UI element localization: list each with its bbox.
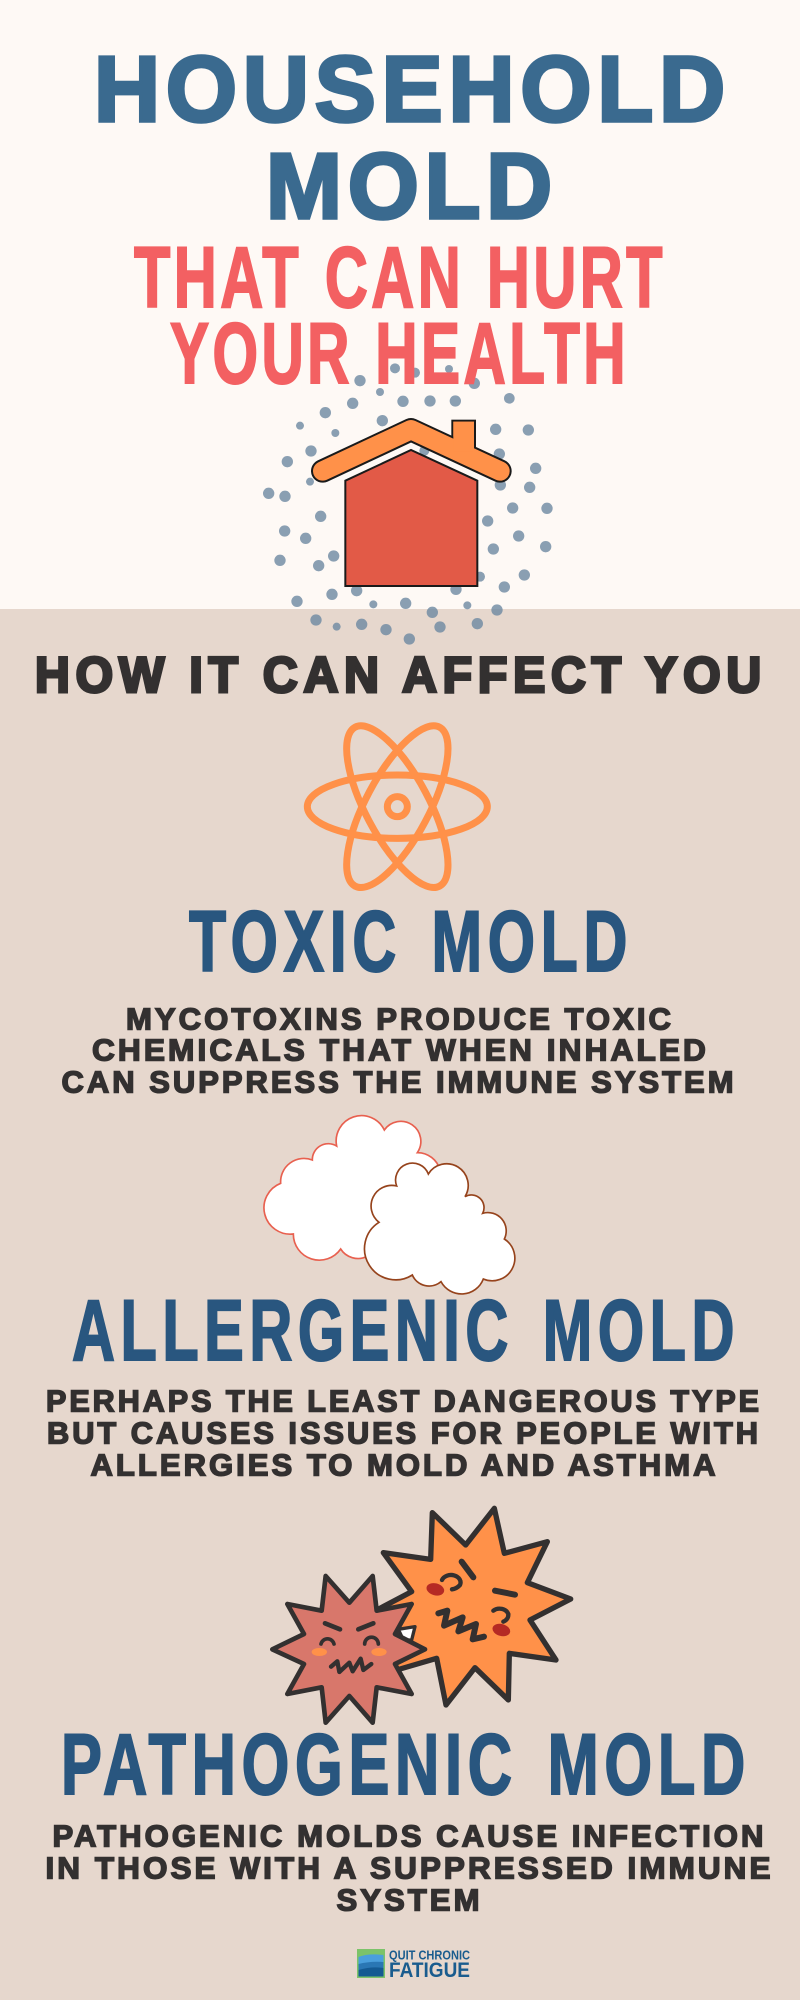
subtitle: that can hurt your health <box>134 230 666 402</box>
text: allergenic mold description: ALLERGIES TO MOLD AND ASTHMA <box>90 1447 719 1482</box>
text: allergenic mold description <box>46 1383 762 1482</box>
icon: orange spore <box>380 1508 571 1705</box>
icon: spore dots <box>263 363 553 645</box>
text: allergenic mold description: BUT CAUSES ISSUES FOR PEOPLE WITH <box>47 1415 761 1450</box>
text: logo wordmark: FATIGUE <box>389 1959 470 1982</box>
text: toxic mold description <box>62 1001 736 1099</box>
panel: bottom background <box>0 609 800 2000</box>
text: logo wordmark <box>389 1948 471 1982</box>
icon: clouds <box>264 1116 515 1294</box>
text: pathogenic mold description: SYSTEM <box>336 1882 482 1917</box>
icon: atom <box>307 712 487 901</box>
text: toxic mold description: MYCOTOXINS PRODUCE TOXIC <box>126 1001 674 1036</box>
title: household mold <box>94 37 731 238</box>
text: toxic mold description: CHEMICALS THAT WHEN INHALED <box>92 1032 709 1067</box>
heading: toxic mold: TOXIC MOLD <box>189 894 633 990</box>
heading: how it can affect you: HOW IT CAN AFFECT YOU <box>35 647 767 703</box>
title: household mold: HOUSEHOLD <box>94 37 731 141</box>
title: household mold: MOLD <box>266 134 558 238</box>
text: logo wordmark: QUIT CHRONIC <box>389 1948 471 1962</box>
text: toxic mold description: CAN SUPPRESS THE IMMUNE SYSTEM <box>62 1064 736 1099</box>
text: allergenic mold description: PERHAPS THE LEAST DANGEROUS TYPE <box>46 1383 762 1418</box>
panel: top background <box>0 0 800 609</box>
text: pathogenic mold description: PATHOGENIC MOLDS CAUSE INFECTION <box>52 1818 767 1853</box>
icon: logo mark <box>357 1949 385 1978</box>
logo: quit chronic fatigue <box>357 1948 471 1982</box>
text: pathogenic mold description: IN THOSE WITH A SUPPRESSED IMMUNE <box>46 1850 774 1885</box>
icon: red spore <box>272 1576 425 1723</box>
icon: angry mold spores <box>272 1508 571 1723</box>
text: pathogenic mold description <box>46 1818 774 1917</box>
icon: house <box>323 421 500 586</box>
